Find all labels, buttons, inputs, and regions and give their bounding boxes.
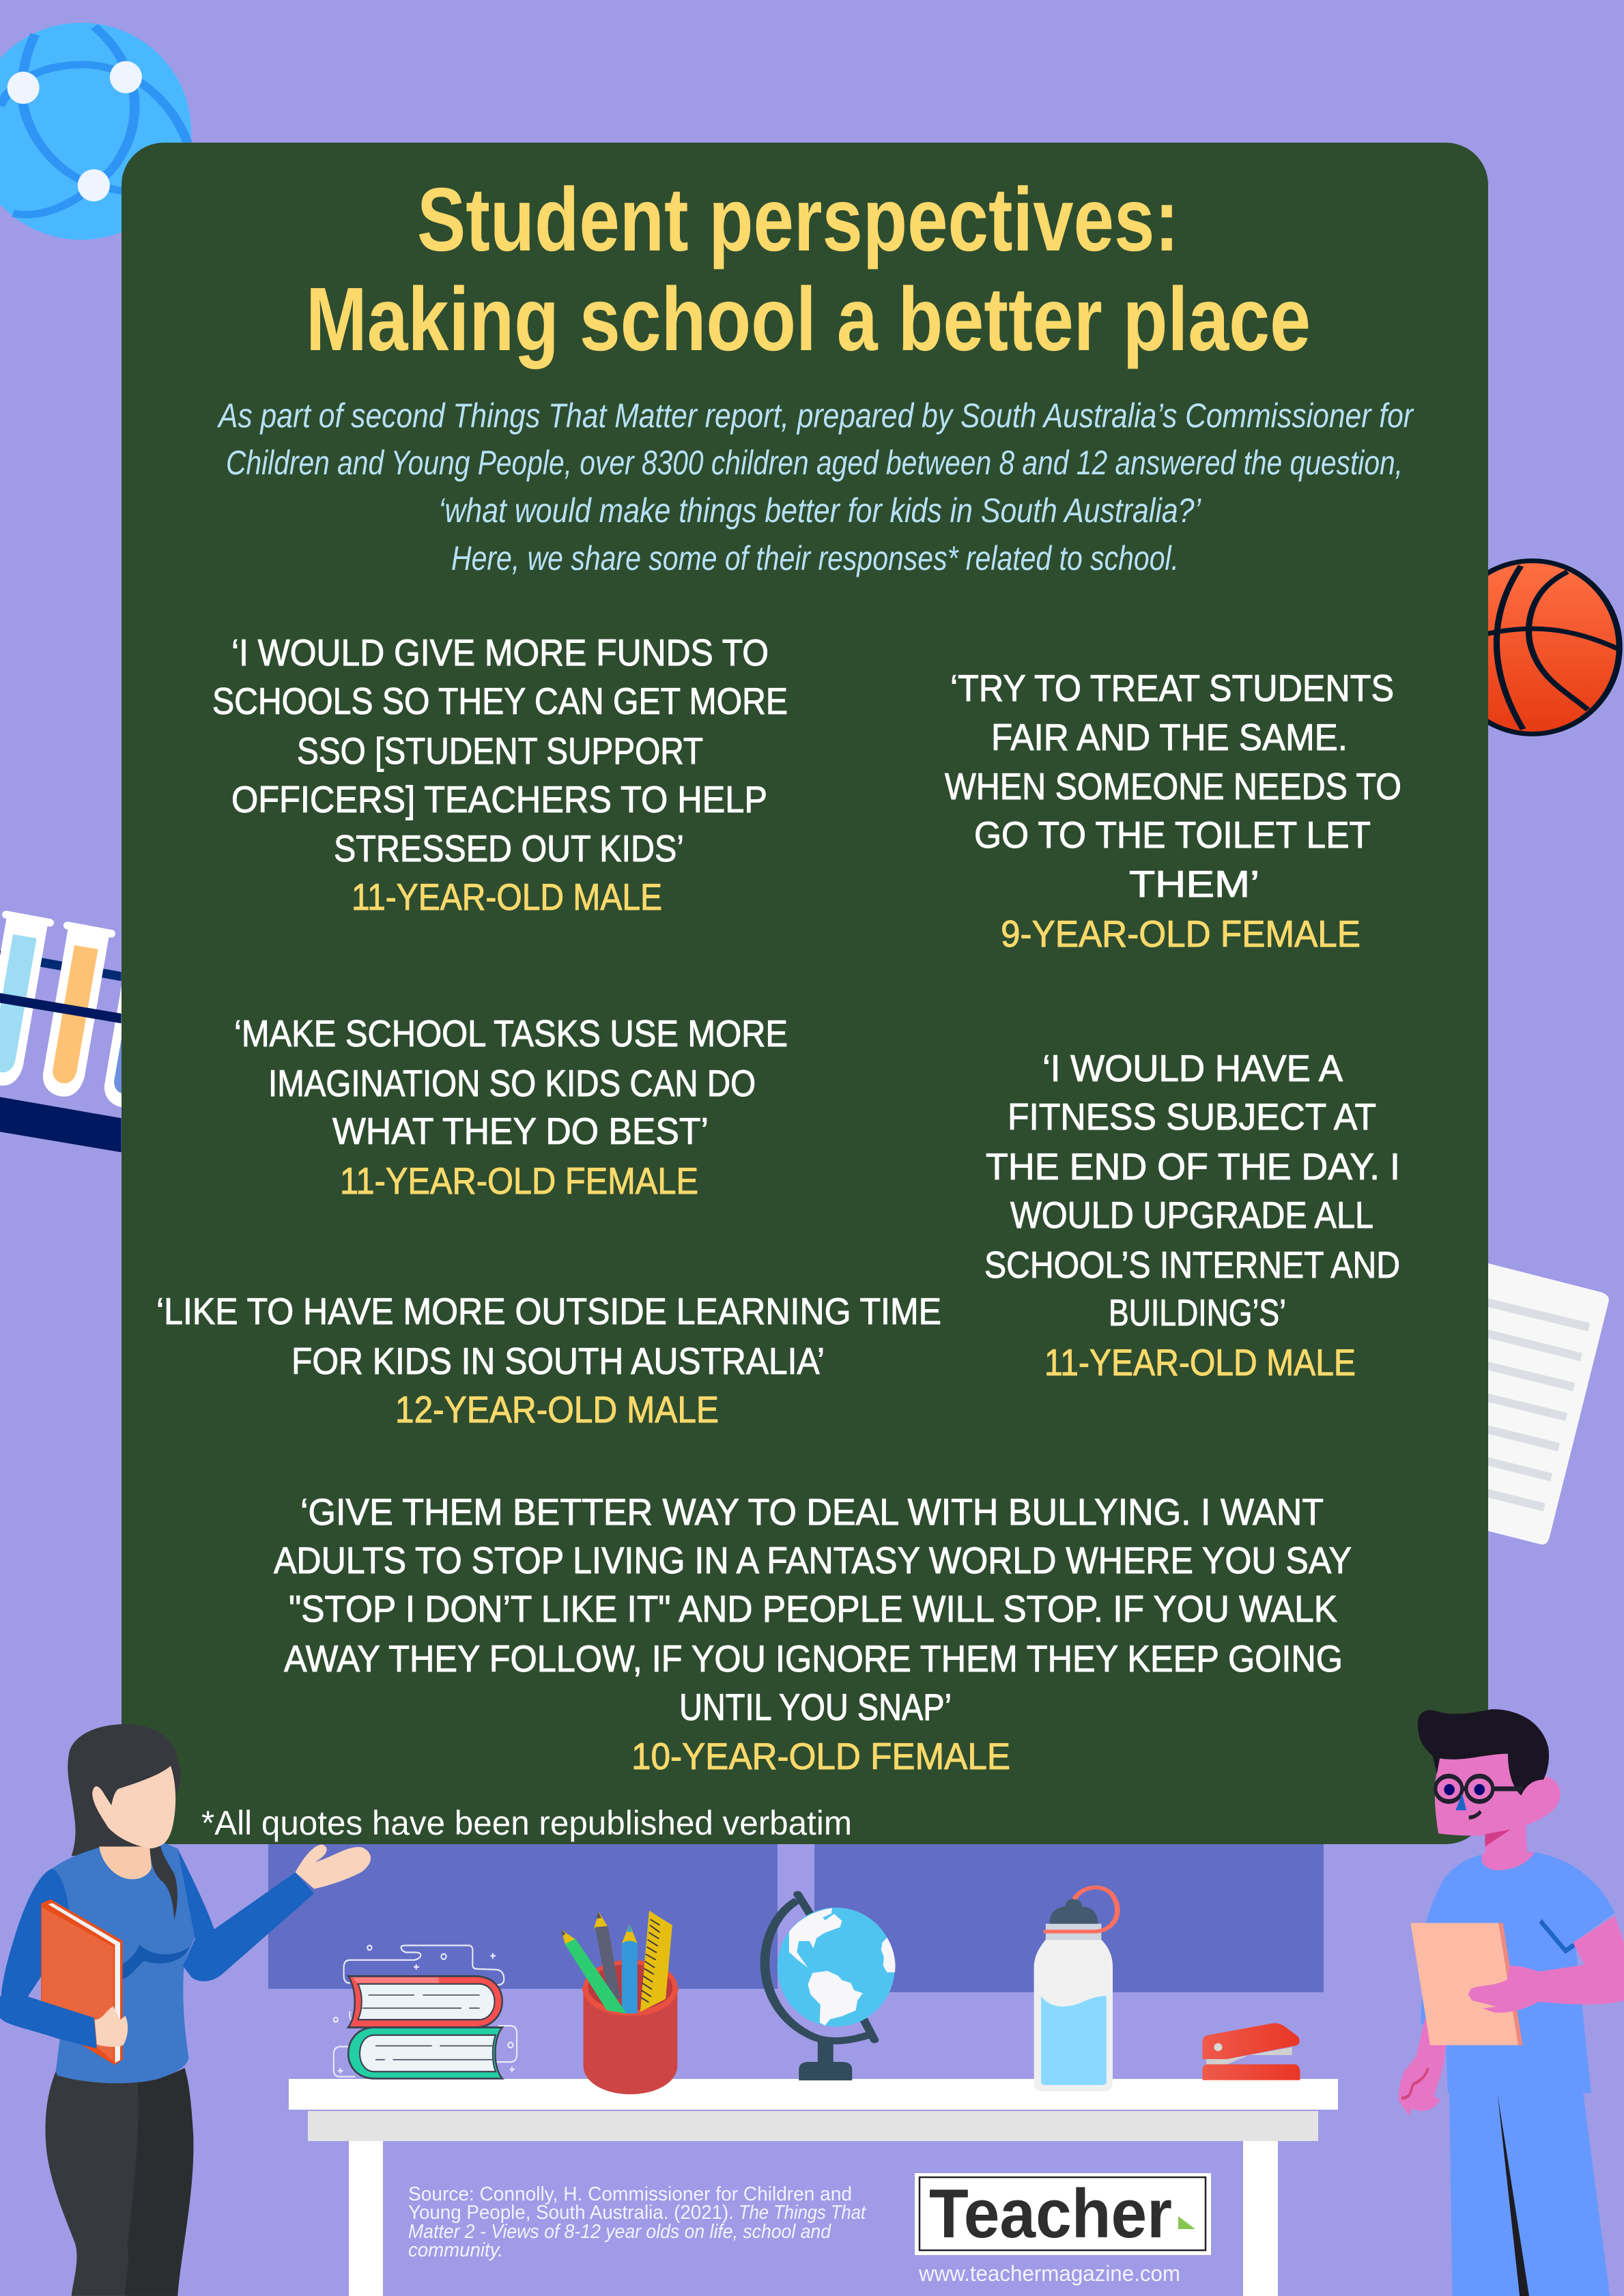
quote: fitness subject: SCHOOL’S INTERNET AND	[984, 1244, 1400, 1286]
quote: treat students fair: GO TO THE TOILET LET	[974, 814, 1371, 856]
quote: imagination: ‘MAKE SCHOOL TASKS USE MORE	[234, 1012, 788, 1054]
icon: stacked books	[334, 1945, 517, 2078]
footnote: *All quotes have been republished verbatim	[201, 1804, 852, 1842]
title: Student perspectives:	[417, 169, 1179, 270]
man figure	[1399, 1709, 1624, 2296]
quote: fitness subject	[984, 1047, 1400, 1383]
quote: bullying: ADULTS TO STOP LIVING IN A FANTASY WORLD WHERE YOU SAY	[274, 1539, 1352, 1581]
quote: outside learning	[156, 1290, 941, 1431]
quote: fitness subject: THE END OF THE DAY. I	[986, 1145, 1400, 1188]
quote: bullying: AWAY THEY FOLLOW, IF YOU IGNORE THEM THEY KEEP GOING	[284, 1637, 1343, 1680]
icon: stapler	[1203, 2023, 1300, 2080]
attribution: 11-YEAR-OLD MALE	[352, 876, 662, 918]
quote: more funds: OFFICERS] TEACHERS TO HELP	[231, 778, 767, 820]
quote: outside learning: ‘LIKE TO HAVE MORE OUTSIDE LEARNING TIME	[156, 1290, 941, 1332]
quote: bullying: "STOP I DON’T LIKE IT" AND PEOPLE WILL STOP. IF YOU WALK	[289, 1588, 1337, 1630]
quote: treat students fair	[945, 667, 1401, 955]
icon: pen cup	[561, 1911, 677, 2094]
window block right	[814, 1836, 1324, 1992]
icon: paper sheet	[1468, 1258, 1609, 1545]
icon: water bottle	[1034, 1887, 1117, 2091]
quote: bullying: ‘GIVE THEM BETTER WAY TO DEAL WITH BULLYING. I WANT	[300, 1491, 1324, 1533]
source text: Source: Connolly, H. Commissioner for Children and	[408, 2183, 852, 2205]
window block left	[268, 1836, 778, 1989]
source text: Young People, South Australia. (2021).	[408, 2202, 734, 2224]
source text: The Things That	[739, 2202, 867, 2224]
quote: more funds	[212, 631, 788, 918]
desk	[289, 2079, 1338, 2296]
panel: chalkboard	[122, 143, 1488, 1844]
title: Making school a better place	[306, 269, 1311, 369]
quote: more funds: SSO [STUDENT SUPPORT	[297, 730, 703, 772]
quote: more funds: ‘I WOULD GIVE MORE FUNDS TO	[231, 631, 769, 674]
source text: Matter 2 - Views of 8-12 year olds on life, school and	[408, 2221, 831, 2243]
logo: Teacher: Teacher	[929, 2176, 1172, 2252]
quote: fitness subject: BUILDING’S’	[1109, 1291, 1286, 1334]
intro text: As part of second Things That Matter report, prepared by South Australia’s Commissioner for	[216, 397, 1414, 435]
attribution: 11-YEAR-OLD FEMALE	[340, 1160, 698, 1202]
intro text	[216, 397, 1414, 577]
woman figure	[0, 1724, 371, 2296]
attribution: 9-YEAR-OLD FEMALE	[1001, 913, 1361, 955]
quote: treat students fair: ‘TRY TO TREAT STUDENTS	[950, 667, 1394, 709]
title	[306, 169, 1311, 369]
quote: bullying	[274, 1491, 1352, 1777]
quote: outside learning: FOR KIDS IN SOUTH AUSTRALIA’	[291, 1340, 825, 1382]
icon: network globe	[0, 23, 191, 240]
quote: fitness subject: ‘I WOULD HAVE A	[1042, 1047, 1343, 1089]
quote: fitness subject: FITNESS SUBJECT AT	[1008, 1095, 1376, 1138]
quote: imagination	[234, 1012, 788, 1202]
intro text: ‘what would make things better for kids in South Australia?’	[438, 491, 1201, 530]
attribution: 11-YEAR-OLD MALE	[1044, 1341, 1356, 1383]
quote: bullying: UNTIL YOU SNAP’	[679, 1686, 952, 1728]
quote: more funds: STRESSED OUT KIDS’	[334, 827, 684, 870]
icon: basketball	[1445, 561, 1619, 734]
source text	[408, 2183, 867, 2261]
quote: fitness subject: WOULD UPGRADE ALL	[1010, 1194, 1373, 1236]
quote: treat students fair: THEM’	[1129, 863, 1259, 905]
quote: imagination: IMAGINATION SO KIDS CAN DO	[268, 1062, 756, 1104]
icon: test tubes	[0, 915, 173, 1152]
attribution: 12-YEAR-OLD MALE	[395, 1388, 719, 1431]
quote: imagination: WHAT THEY DO BEST’	[332, 1110, 709, 1152]
quote: treat students fair: WHEN SOMEONE NEEDS TO	[945, 765, 1401, 807]
icon: desk globe	[765, 1894, 896, 2080]
quote: more funds: SCHOOLS SO THEY CAN GET MORE	[212, 680, 788, 722]
website url: www.teachermagazine.com	[918, 2261, 1180, 2286]
attribution: 10-YEAR-OLD FEMALE	[631, 1735, 1010, 1777]
source text: community.	[408, 2239, 503, 2261]
intro text: Here, we share some of their responses* related to school.	[451, 539, 1179, 577]
quote: treat students fair: FAIR AND THE SAME.	[991, 716, 1348, 758]
